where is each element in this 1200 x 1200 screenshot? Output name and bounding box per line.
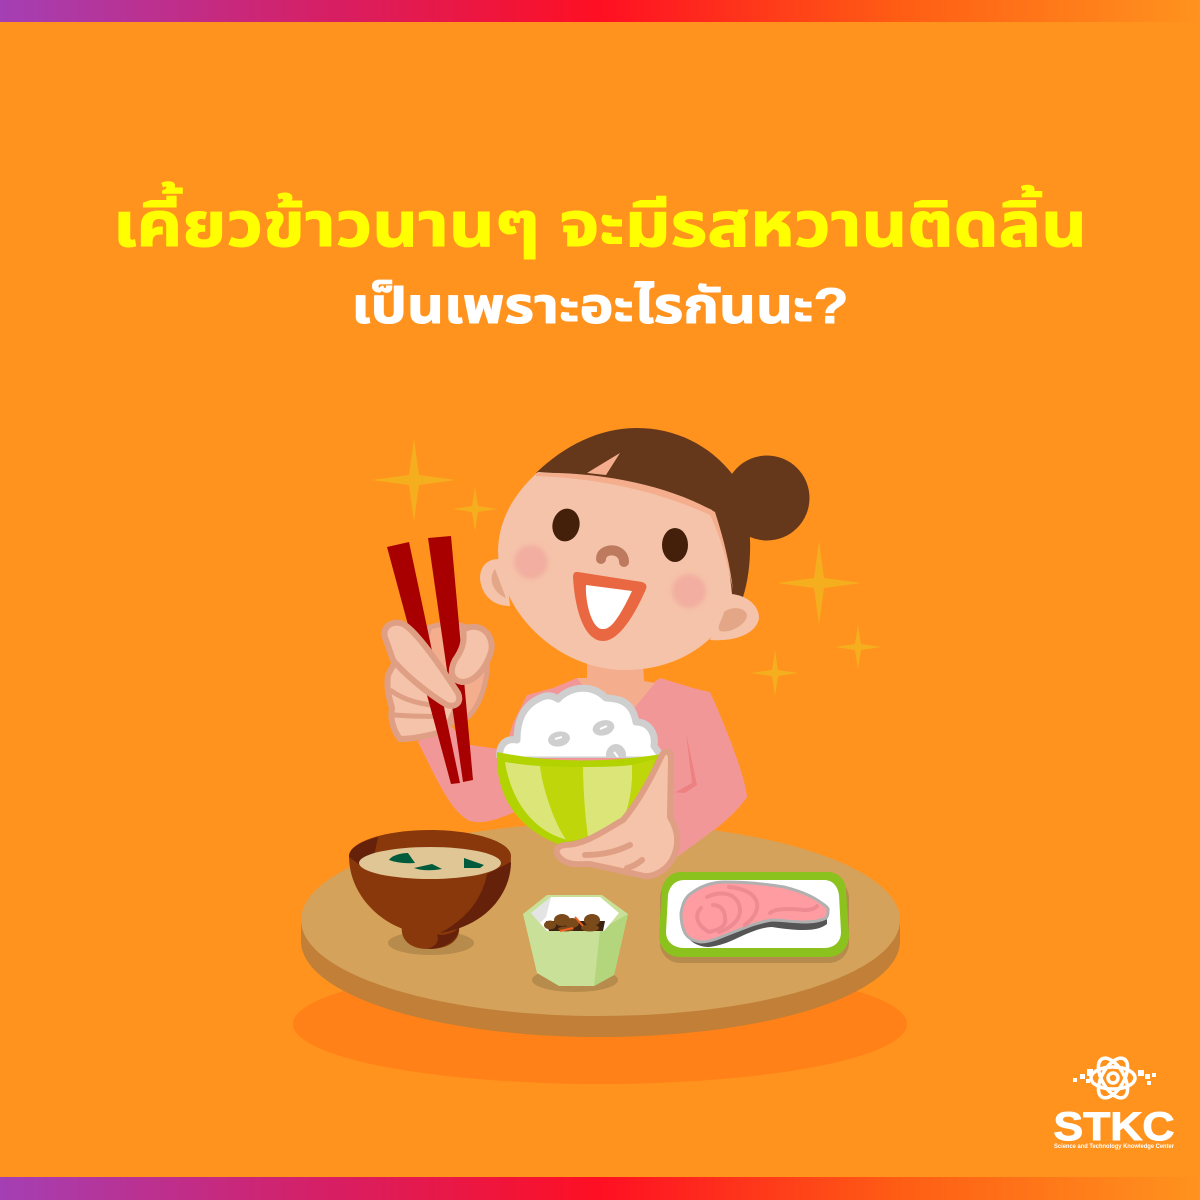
woman's body and left arm xyxy=(418,678,747,857)
side dish cup xyxy=(523,895,628,992)
plate white xyxy=(666,880,841,948)
soup surface xyxy=(359,847,501,879)
table top xyxy=(301,823,900,1016)
headline: เคี้ยวข้าวนานๆ จะมีรสหวานติดลิ้น xyxy=(113,181,1087,260)
right ear xyxy=(710,594,759,640)
title xyxy=(113,181,1087,334)
illustration: table shadow xyxy=(293,964,907,1084)
salmon markings xyxy=(697,887,817,932)
carrot strips xyxy=(560,917,583,931)
face xyxy=(498,472,732,670)
miso soup bowl xyxy=(349,830,511,955)
soup bowl shading xyxy=(349,837,511,933)
left ear xyxy=(480,559,510,606)
bottom gradient bar xyxy=(0,1177,1200,1200)
soup bowl body xyxy=(349,830,511,934)
bowl-holding hand xyxy=(557,752,677,876)
salmon plate xyxy=(659,872,849,963)
cheeks xyxy=(514,545,706,608)
cup interior xyxy=(531,897,619,931)
woman's head xyxy=(480,428,810,670)
seaweed xyxy=(389,853,484,870)
sleeve fold xyxy=(674,733,697,800)
logo tagline: Science and Technology Knowledge Center xyxy=(1054,1144,1175,1150)
cup body xyxy=(523,895,628,986)
salmon flesh xyxy=(681,882,828,942)
cup shade xyxy=(594,914,628,986)
rice xyxy=(500,688,664,766)
plate shadow xyxy=(660,878,849,963)
finger lines xyxy=(585,845,642,868)
logo wordmark: STKC xyxy=(1054,1105,1174,1149)
simmered beans xyxy=(544,914,605,932)
nose xyxy=(601,550,624,562)
STKC logo xyxy=(1054,1053,1175,1150)
sparkles xyxy=(372,438,881,696)
table edge xyxy=(301,920,900,1037)
finger creases xyxy=(390,690,445,716)
soup bowl foot xyxy=(402,925,459,949)
right ear inner xyxy=(719,608,747,632)
subheadline: เป็นเพราะอะไรกันนะ? xyxy=(352,278,848,334)
plate rim xyxy=(659,872,849,957)
logo atom icon xyxy=(1091,1053,1135,1103)
chopstick hand: lower fingers xyxy=(387,660,460,739)
chopsticks xyxy=(387,536,473,784)
bowl right stripe xyxy=(622,759,655,822)
rice bowl xyxy=(497,688,664,847)
restored body over table xyxy=(640,790,747,870)
bowl center stripe xyxy=(540,766,588,841)
chopstick hand: index finger xyxy=(384,623,459,706)
bowl light stripes xyxy=(505,762,632,840)
salmon skin xyxy=(682,908,827,947)
logo pixels xyxy=(1073,1069,1156,1085)
mouth outer xyxy=(573,572,646,641)
eyes xyxy=(549,506,688,562)
left ear inner xyxy=(492,569,506,598)
hair bun xyxy=(724,456,810,540)
chopstick hand: palm xyxy=(405,624,488,735)
cup shadow xyxy=(532,968,618,992)
top gradient bar xyxy=(0,0,1200,22)
soup bowl shadow xyxy=(388,931,474,955)
hair xyxy=(536,428,750,597)
mouth inner xyxy=(586,585,632,629)
chopstick hand: thumb xyxy=(452,627,492,682)
hairline shade xyxy=(536,453,733,590)
rice grains xyxy=(548,720,626,756)
neck xyxy=(577,660,655,725)
bowl rim and outer xyxy=(497,752,662,847)
